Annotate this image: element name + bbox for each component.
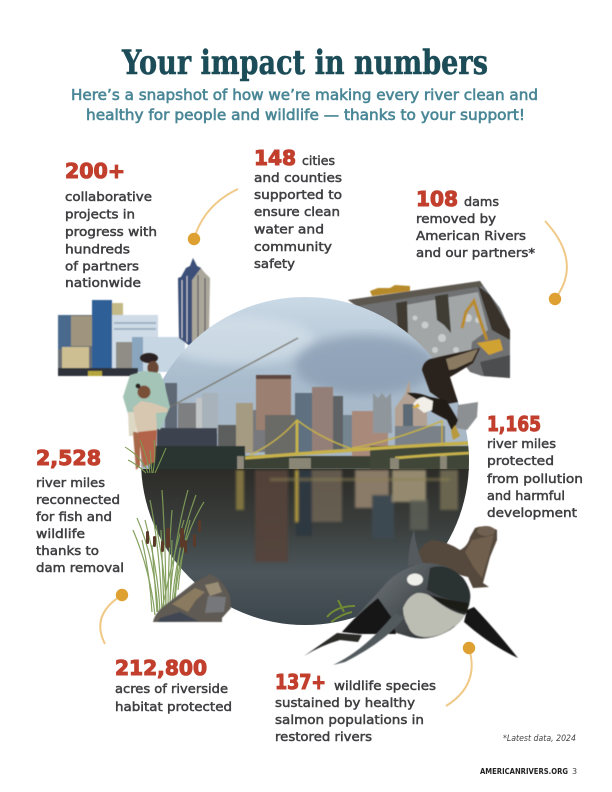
photo river water <box>130 469 480 629</box>
panel: circular city and river photo <box>130 290 480 629</box>
orca left flipper <box>333 613 405 665</box>
stat: 1,165 river miles: protected <box>487 454 554 469</box>
stat: 137+ wildlife species <box>275 670 436 745</box>
stat: 148 cities: ensure clean <box>254 205 340 220</box>
icon: tall skyscraper <box>178 258 210 346</box>
footnote: *Latest data, 2024 <box>503 734 576 744</box>
stat: 108 dams <box>416 187 536 261</box>
icon: left skyline cutout <box>58 258 210 376</box>
stat: 1,165 river miles <box>487 412 583 521</box>
icon: rock <box>153 574 231 622</box>
stat: 108 dams: dams <box>464 195 499 210</box>
stat: 148 cities: 148 <box>254 146 296 170</box>
orca tail and fluke <box>304 633 362 656</box>
orca eye patch <box>407 574 423 586</box>
connector: 212,800 dot and arc <box>100 589 128 644</box>
stat: 212,800 acres <box>115 656 232 715</box>
stat: 137+ wildlife species: salmon populations in <box>275 713 424 728</box>
stat: 108 dams: American Rivers <box>416 229 526 244</box>
stat: 1,165 river miles: river miles <box>487 437 556 452</box>
fishing rod <box>170 338 298 407</box>
eagle wing <box>422 348 480 404</box>
photo skyline buildings <box>150 375 470 470</box>
icon: shore grass <box>125 440 166 473</box>
woman <box>140 353 158 363</box>
stat: 212,800 acres: 212,800 <box>115 656 207 680</box>
stat: 2,528 river miles: thanks to <box>36 544 99 559</box>
connector: 137+ dot and arc <box>446 642 475 706</box>
stat: 200+ collaborative projects: nationwide <box>65 276 141 291</box>
stat: 2,528 river miles: river miles <box>36 476 105 491</box>
stat: 108 dams: removed by <box>416 212 496 227</box>
orca dorsal fin <box>408 529 424 566</box>
orca head shade <box>427 566 470 606</box>
subtitle <box>71 86 538 124</box>
footer url and page number: AMERICANRIVERS.ORG <box>480 767 568 776</box>
stat: 200+ collaborative projects: progress with <box>65 225 157 240</box>
stat: 137+ wildlife species: restored rivers <box>275 730 372 745</box>
icon: cattails <box>133 490 204 615</box>
stat: 148 cities: water and <box>254 222 324 238</box>
orca belly <box>403 593 465 637</box>
stat: 200+ collaborative projects: of partners <box>65 260 139 274</box>
stat: 200+ collaborative projects: 200+ <box>65 159 125 183</box>
stat: 212,800 acres: acres of riverside <box>115 682 228 697</box>
stat: 148 cities: community <box>254 240 332 255</box>
stat: 148 cities: supported to <box>254 188 342 203</box>
photo water reflections <box>236 470 458 562</box>
icon: mother and child fishing <box>123 338 298 470</box>
title: Your impact in numbers <box>121 43 488 83</box>
stat: 2,528 river miles: reconnected <box>36 493 120 508</box>
photo yellow bridge <box>237 420 470 471</box>
stat: 2,528 river miles: dam removal <box>36 561 124 576</box>
stat: 1,165 river miles: 1,165 <box>487 412 541 436</box>
stat: 148 cities: and counties <box>254 171 342 186</box>
icon: orca <box>304 529 518 665</box>
icon: river otter <box>418 526 497 588</box>
subtitle: healthy for people and wildlife — thanks to your support! <box>86 106 525 124</box>
connector: 148 dot and arc <box>188 189 238 245</box>
child <box>138 386 150 398</box>
stat: 137+ wildlife species: wildlife species <box>334 679 436 694</box>
stat: 2,528 river miles: wildlife <box>36 527 85 542</box>
eagle head <box>413 397 433 413</box>
icon: dam removal cutout <box>348 281 510 378</box>
photo plant at shore <box>327 600 355 622</box>
orca dark underside <box>342 598 396 634</box>
stat: 200+ collaborative projects: collaborative <box>65 190 152 205</box>
photo sky <box>130 290 480 470</box>
stat: 1,165 river miles: from pollution <box>487 472 583 487</box>
subtitle: Here’s a snapshot of how we’re making every river clean and <box>71 86 538 104</box>
stat: 200+ collaborative projects: projects in <box>65 208 135 222</box>
stat: 148 cities: cities <box>302 154 335 169</box>
stat: 108 dams: 108 <box>416 187 458 211</box>
stat: 2,528 river miles: for fish and <box>36 510 112 525</box>
stat: 148 cities <box>254 146 342 272</box>
stat: 2,528 river miles: 2,528 <box>36 446 101 470</box>
orca right flipper <box>464 607 518 658</box>
stat: 200+ collaborative projects <box>65 159 157 291</box>
stat: 1,165 river miles: and harmful <box>487 489 565 504</box>
footer url and page number: 3 <box>572 767 577 776</box>
icon: bald eagle <box>407 348 480 440</box>
orca mouth <box>429 595 468 613</box>
stat: 200+ collaborative projects: hundreds <box>65 242 130 258</box>
stat: 1,165 river miles: development <box>487 506 577 521</box>
stat: 108 dams: and our partners* <box>416 246 536 261</box>
orca body <box>342 563 470 638</box>
stat: 137+ wildlife species: 137+ <box>275 670 326 694</box>
stat: 137+ wildlife species: sustained by healthy <box>275 696 415 711</box>
stat: 148 cities: safety <box>254 257 295 272</box>
eagle tail <box>456 402 478 430</box>
stat: 212,800 acres: habitat protected <box>115 700 232 715</box>
connector: 108 dot and arc <box>545 221 567 305</box>
stat: 2,528 river miles <box>36 446 124 576</box>
